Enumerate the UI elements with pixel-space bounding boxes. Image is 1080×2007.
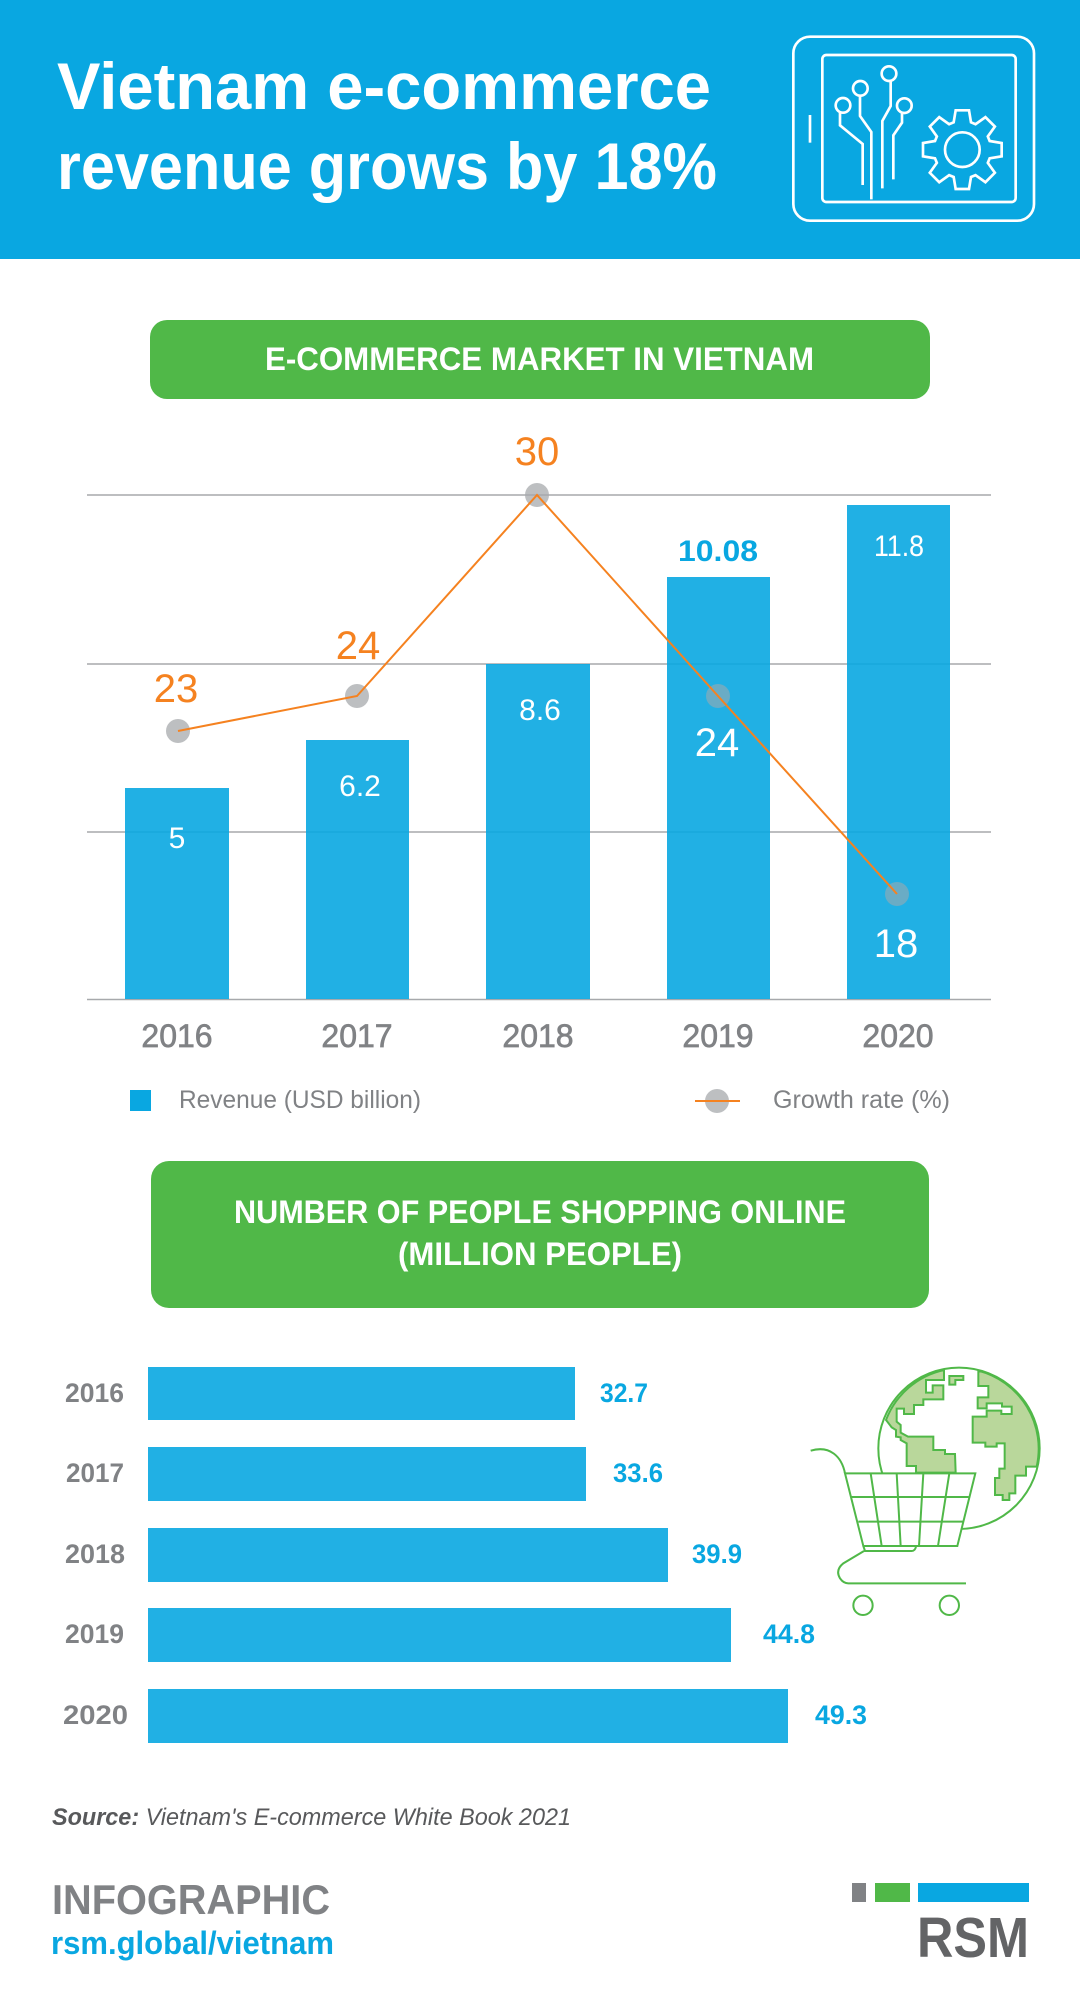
- chart: revenue bars and growth line: [87, 430, 991, 1054]
- year labels: [63, 1378, 128, 1730]
- title: revenue grows by 18%: [57, 129, 717, 203]
- value labels: 32.7: [600, 1378, 648, 1408]
- source note: Source: Vietnam's E-commerce White Book 2021: [52, 1804, 571, 1831]
- revenue value labels: 11.8: [874, 530, 924, 563]
- value labels: 39.9: [692, 1539, 742, 1569]
- revenue value labels: 8.6: [519, 694, 561, 727]
- year labels: 2020: [63, 1700, 128, 1730]
- growth rate labels: 18: [874, 922, 918, 966]
- panel: header: [0, 0, 1080, 259]
- icon: shopping cart with globe: [811, 1368, 1040, 1615]
- year labels: 2018: [65, 1539, 125, 1569]
- logo: RSM: RSM: [917, 1906, 1029, 1970]
- title: Vietnam e-commerce: [57, 49, 711, 123]
- value labels: 49.3: [815, 1700, 867, 1730]
- heading: e-commerce market banner: [150, 320, 930, 399]
- legend: Growth rate (%): [773, 1086, 950, 1114]
- heading: e-commerce market banner: E-COMMERCE MARKET IN VIETNAM: [265, 341, 814, 377]
- year labels: 2019: [65, 1619, 124, 1649]
- revenue value labels: 10.08: [678, 535, 758, 568]
- x axis years: 2016: [141, 1018, 213, 1054]
- heading: number of people shopping online banner: NUMBER OF PEOPLE SHOPPING ONLINE: [234, 1194, 846, 1230]
- growth rate line: [178, 495, 897, 894]
- year labels: 2016: [65, 1378, 124, 1408]
- footer: website link: rsm.global/vietnam: [51, 1925, 334, 1961]
- logo: RSM: [852, 1883, 1029, 1970]
- revenue value labels: 5: [169, 822, 185, 855]
- chart: online shoppers bars: [63, 1367, 867, 1743]
- legend: [130, 1086, 950, 1114]
- growth rate markers: [166, 483, 909, 906]
- revenue value labels: [169, 530, 924, 855]
- footer: infographic label: INFOGRAPHIC: [52, 1876, 330, 1923]
- value labels: 44.8: [763, 1619, 815, 1649]
- growth rate labels: 30: [515, 430, 559, 474]
- x axis years: 2020: [862, 1018, 934, 1054]
- year labels: 2017: [66, 1458, 124, 1488]
- legend: Revenue (USD billion): [179, 1086, 421, 1114]
- heading: number of people shopping online banner: (MILLION PEOPLE): [398, 1236, 682, 1272]
- title: [57, 49, 717, 203]
- heading: number of people shopping online banner: [151, 1161, 929, 1308]
- growth rate labels: 23: [154, 667, 198, 711]
- x axis years: 2019: [682, 1018, 754, 1054]
- growth rate labels: 24: [336, 624, 380, 668]
- growth rate labels: [154, 430, 918, 966]
- revenue value labels: 6.2: [339, 770, 381, 803]
- x axis years: 2017: [321, 1018, 393, 1054]
- icon: tablet with circuit and gear: [793, 37, 1034, 221]
- growth rate labels: 24: [695, 721, 739, 765]
- shopper bars: [148, 1367, 788, 1743]
- value labels: 33.6: [613, 1458, 663, 1488]
- revenue bars: [125, 505, 950, 999]
- value labels: [600, 1378, 867, 1730]
- x axis years: [141, 1018, 934, 1054]
- x axis years: 2018: [502, 1018, 574, 1054]
